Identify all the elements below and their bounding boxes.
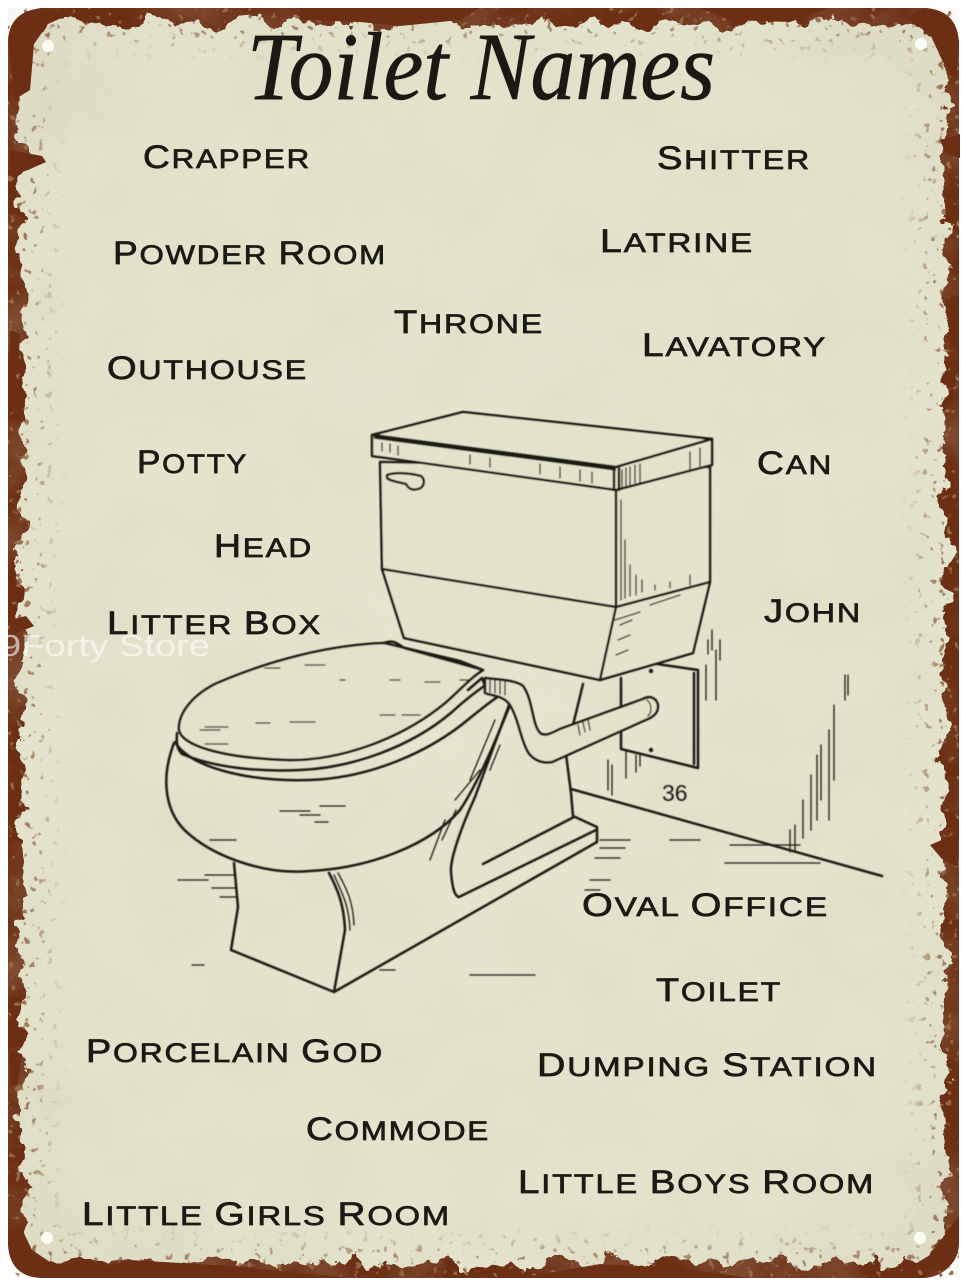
flush handle [387, 473, 424, 490]
label: CRAPPER [143, 139, 311, 175]
label: LITTLE GIRLS ROOM [82, 1196, 451, 1232]
label: OVAL OFFICE [582, 887, 829, 923]
water pipe [485, 678, 658, 762]
label: CAN [757, 445, 833, 481]
watermark: 9Forty Store [0, 628, 210, 663]
label: LAVATORY [642, 327, 827, 363]
tank [372, 412, 712, 680]
label: LITTLE BOYS ROOM [518, 1164, 875, 1200]
floor and wall line [571, 789, 882, 876]
label: LITTER BOX [107, 605, 322, 641]
label: PORCELAIN GOD [86, 1033, 384, 1069]
label: SHITTER [657, 140, 811, 176]
label: DUMPING STATION [537, 1047, 878, 1083]
title: Toilet Names [247, 13, 715, 120]
bowl [166, 700, 512, 872]
flush plate on wall [621, 664, 698, 768]
toilet line drawing [166, 412, 882, 992]
seat and lid [175, 642, 505, 780]
label: THRONE [394, 304, 544, 340]
shading and dashes [178, 630, 848, 975]
label: LATRINE [600, 223, 754, 259]
figure number: 36 [662, 780, 688, 806]
label: POWDER ROOM [113, 235, 387, 271]
base and pedestal [231, 684, 597, 992]
label: HEAD [214, 528, 313, 564]
toilet name labels [82, 139, 878, 1232]
label: JOHN [764, 593, 862, 629]
label: OUTHOUSE [107, 350, 308, 386]
label: POTTY [137, 444, 248, 480]
label: COMMODE [306, 1111, 490, 1147]
label: TOILET [656, 972, 782, 1008]
